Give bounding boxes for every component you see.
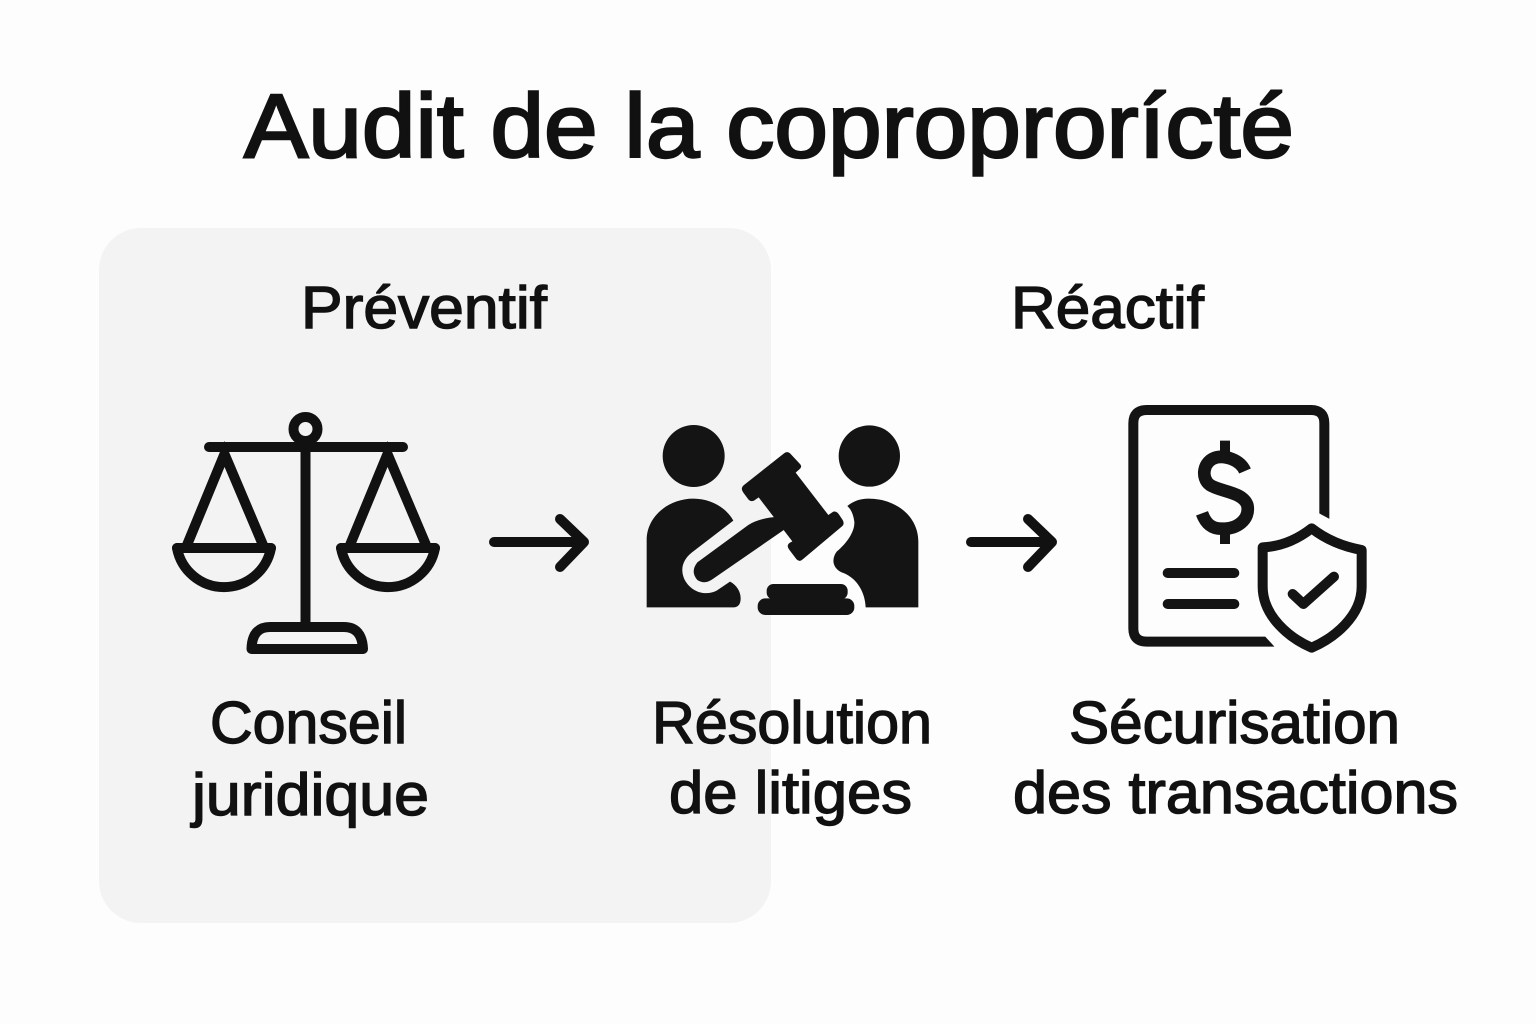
heading: Réactif: Réactif <box>1011 275 1205 341</box>
label: Sécurisation des transactions <box>1013 690 1458 826</box>
label: Sécurisation des transactions: Sécurisation <box>1069 690 1400 756</box>
title: Audit de la coproprorícté <box>244 77 1294 177</box>
label: Conseil juridique <box>190 690 429 828</box>
label: Conseil juridique: Conseil <box>210 690 407 756</box>
arrow: conseil to résolution <box>494 519 584 567</box>
icon: secured financial document <box>1133 410 1362 648</box>
label: Conseil juridique: juridique <box>190 762 429 828</box>
panel: préventif background <box>99 228 771 923</box>
label: Résolution de litiges: Résolution <box>652 690 932 756</box>
icon: people with gavel <box>647 425 918 615</box>
label: Résolution de litiges: de litiges <box>669 760 912 826</box>
arrow: résolution to sécurisation <box>971 519 1052 567</box>
icon: scales of justice <box>177 417 435 649</box>
heading: Préventif: Préventif <box>301 275 548 341</box>
label: Résolution de litiges <box>652 690 932 826</box>
label: Sécurisation des transactions: des transactions <box>1013 760 1458 826</box>
